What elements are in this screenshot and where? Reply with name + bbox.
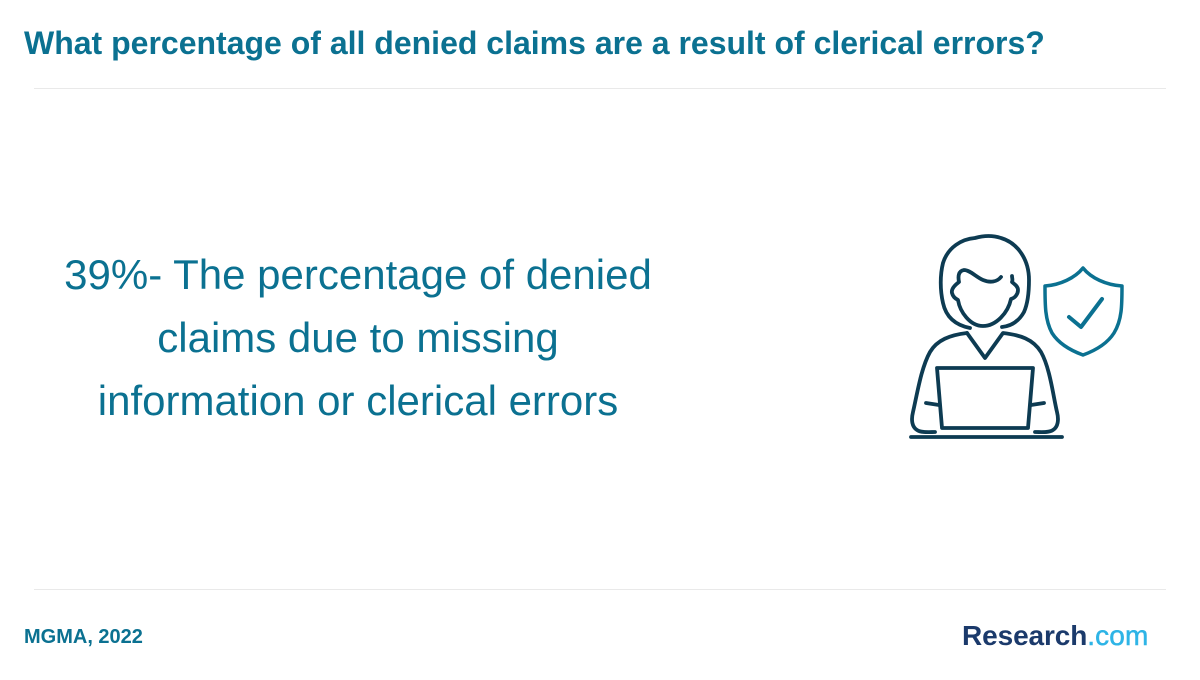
main statistic text: 39%- The percentage of denied — [64, 251, 652, 298]
title: What percentage of all denied claims are a result of clerical errors? — [24, 25, 1045, 61]
main statistic text — [64, 251, 652, 424]
icon: person at laptop with shield — [909, 234, 1124, 439]
source: MGMA, 2022 — [24, 626, 143, 648]
main statistic text: information or clerical errors — [98, 377, 618, 424]
main statistic text: claims due to missing — [157, 314, 559, 361]
icon: shield with check — [1045, 268, 1122, 355]
logo: Research.com — [962, 620, 1148, 651]
icon: person at laptop — [911, 236, 1062, 437]
